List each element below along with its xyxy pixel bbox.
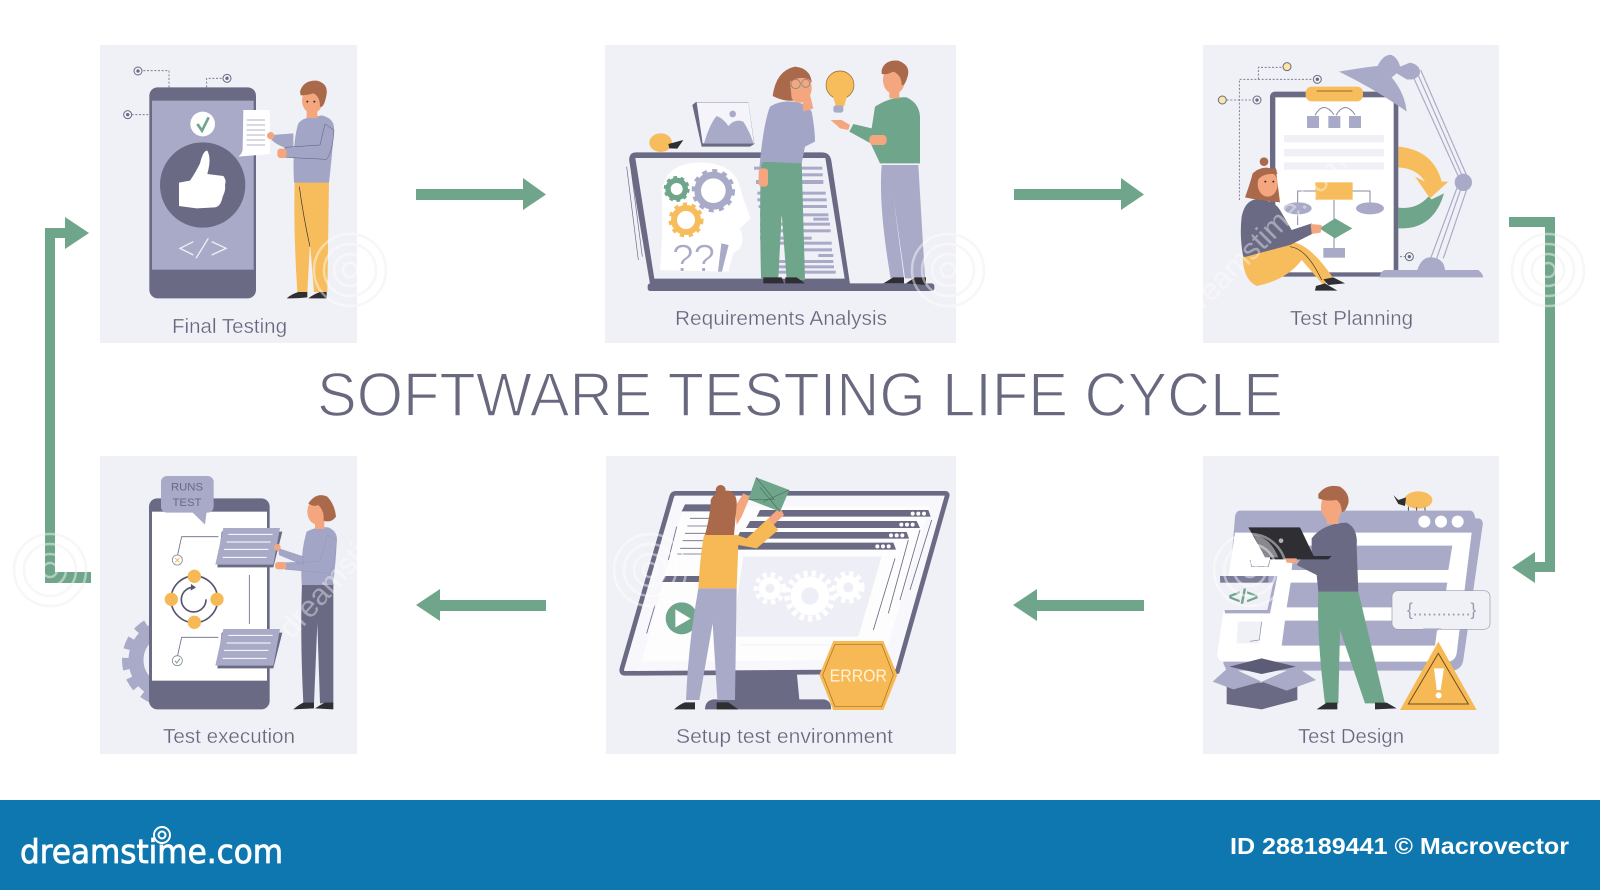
arrow: Test execution to Final Testing: [45, 217, 91, 583]
icon: spiral: [154, 827, 170, 843]
lamp shade: [1339, 55, 1420, 112]
arrow: Test Design to Setup test environment: [1013, 589, 1144, 621]
panel: Requirements Analysis: [605, 45, 956, 343]
label: Test execution: Test execution: [163, 726, 295, 748]
callout: RUNS TEST: [161, 476, 214, 525]
illustration: phone with thumbs up and tester: [124, 67, 334, 298]
panel: Test execution: [100, 456, 357, 754]
title: SOFTWARE TESTING LIFE CYCLE: [317, 361, 1283, 430]
cards: [215, 528, 282, 668]
label: Final Testing: Final Testing: [172, 316, 287, 338]
icon: light bulb: [826, 71, 854, 113]
icon: cycle: [165, 570, 224, 629]
arrow: Setup test environment to Test execution: [416, 589, 546, 621]
arrow: Requirements Analysis to Test Planning: [1014, 178, 1144, 210]
label: Test Planning: Test Planning: [1290, 308, 1413, 330]
watermark: dreamstime.com: [273, 458, 446, 645]
panel: Setup test environment: [606, 456, 956, 754]
credit line: ID 288189441 © Macrovector: [1230, 833, 1569, 859]
logo: dreamstime.com: dreamstime.com: [20, 832, 283, 871]
footer banner: [0, 800, 1600, 890]
label: Setup test environment: Setup test environment: [676, 726, 893, 748]
watermark: [14, 147, 1584, 645]
label: Test Design: Test Design: [1298, 726, 1404, 748]
callout: code braces: [1392, 591, 1490, 639]
icon: warning triangle: [1400, 642, 1477, 710]
label: Requirements Analysis: Requirements Analysis: [675, 308, 887, 330]
text: question marks: ??: [672, 238, 715, 281]
icon: play button: [666, 602, 698, 634]
illustration: phone running tests: [126, 476, 337, 709]
icon: laptop: [1248, 527, 1332, 559]
illustration: monitor, error sign and engineer: [622, 477, 947, 710]
box: [1213, 658, 1316, 709]
icon: envelope: [748, 477, 789, 512]
panel: Final Testing: [100, 45, 357, 343]
figure head: woman with glasses: [773, 67, 813, 112]
arrow: Final Testing to Requirements Analysis: [416, 178, 546, 210]
icon: code window: </>: [1228, 586, 1258, 609]
watermark: dreamstime.com: [1174, 147, 1354, 327]
callout: code braces: {............}: [1407, 600, 1477, 620]
illustration: laptop, analysts and light bulb: [627, 61, 934, 291]
illustration: clipboard, lamp and seated planner: [1218, 55, 1483, 291]
figure: seated woman: [1241, 157, 1345, 291]
callout: RUNS TEST: RUNS: [171, 482, 203, 494]
panel: Test Design: [1203, 456, 1499, 754]
sign: ERROR: [819, 641, 897, 710]
illustration: browser window, laptop user, warning sign: [1213, 486, 1490, 710]
icon: code window: [1220, 576, 1277, 613]
callout: RUNS TEST: TEST: [173, 497, 202, 509]
arrow: Test Planning to Test Design: [1509, 217, 1555, 583]
sign: ERROR: ERROR: [830, 666, 887, 686]
panel: Test Planning: [1203, 45, 1499, 343]
